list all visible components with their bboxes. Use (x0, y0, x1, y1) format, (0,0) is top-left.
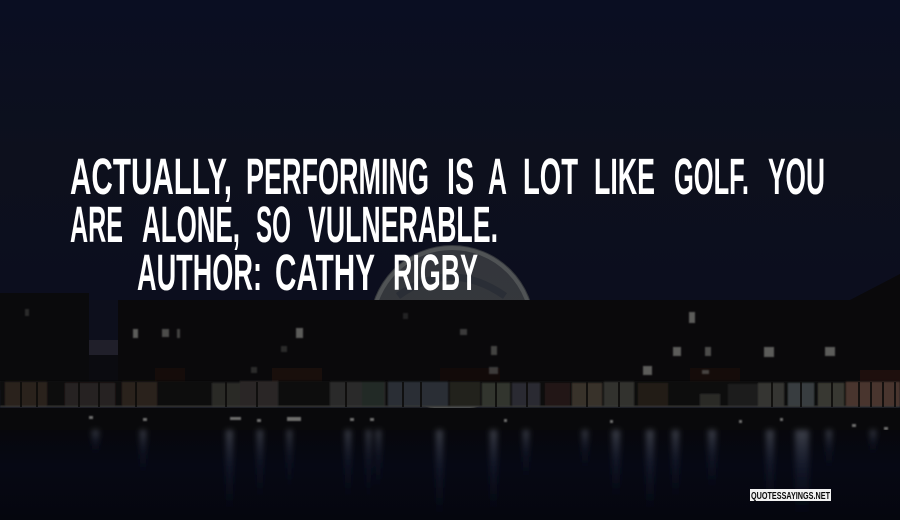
watermark: quotessayings.net (750, 489, 831, 502)
quote line 1: A (488, 148, 507, 205)
author attribution: RIGBY (393, 244, 478, 301)
harbour water (0, 430, 900, 520)
arcade columns (20, 382, 896, 407)
author attribution (137, 244, 478, 301)
quote line 1: YOU (768, 148, 825, 205)
author attribution: AUTHOR: (137, 244, 262, 301)
quote line 2 (70, 196, 498, 253)
quay lamps (89, 416, 888, 430)
background: night sky (0, 0, 900, 305)
quote line 2: ALONE, (142, 196, 240, 253)
quote text (70, 148, 825, 301)
watermark: quotessayings.net: QUOTESSAYINGS.NET (751, 490, 830, 502)
quote line 2: VULNERABLE. (308, 196, 498, 253)
author attribution: CATHY (275, 244, 375, 301)
quote line 1: ACTUALLY, (70, 148, 232, 205)
illuminated ground floor arcade (0, 381, 900, 407)
quote line 1: IS (447, 148, 474, 205)
quote line 1: GOLF. (674, 148, 749, 205)
quay wall (0, 408, 900, 432)
quote line 1: PERFORMING (246, 148, 429, 205)
lit windows (25, 309, 835, 375)
moon dome behind buildings (369, 245, 535, 411)
quote line 2: SO (256, 196, 291, 253)
quote line 1 (70, 148, 825, 205)
background: waterfront buildings (0, 274, 900, 390)
quote line 1: LIKE (594, 148, 655, 205)
quote line 2: ARE (70, 196, 123, 253)
quote line 1: LOT (523, 148, 578, 205)
light reflections on the water (92, 430, 876, 520)
